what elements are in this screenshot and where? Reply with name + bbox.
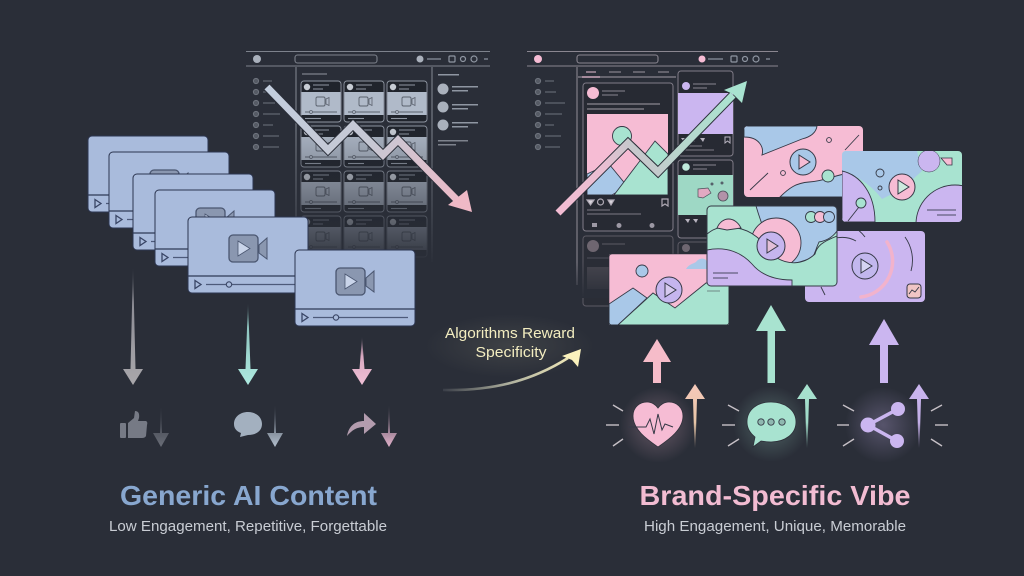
brand dashboard wireframe	[527, 52, 778, 306]
arrow: curved transition	[443, 349, 581, 390]
heading: generic AI content: Generic AI Content	[120, 480, 377, 511]
small up arrow: mint	[797, 384, 817, 448]
sidebar menu	[253, 78, 280, 150]
small down arrow: likes	[153, 404, 169, 447]
second post card faded	[575, 236, 677, 306]
subheading: generic: Low Engagement, Repetitive, Forgettable	[109, 519, 387, 535]
brand video card: mountains	[609, 254, 729, 325]
side post: purple	[678, 71, 733, 156]
icon: thumbs up	[120, 411, 147, 438]
brand video card: purple rings	[805, 231, 925, 302]
small up arrow: peach	[685, 384, 705, 448]
callout: algorithms reward specificity: Specificity	[476, 345, 547, 361]
small down arrow: shares	[381, 404, 397, 447]
large up arrow: pink	[643, 339, 671, 383]
icon: glowing chat bubble	[722, 386, 809, 462]
icon: share arrow	[347, 413, 376, 436]
side post: mint	[678, 160, 733, 238]
generic dashboard wireframe	[246, 52, 490, 267]
rising trend arrow	[558, 81, 747, 213]
callout: algorithms reward specificity	[425, 314, 595, 378]
small up arrow: purple	[909, 384, 929, 448]
stack of generic video cards	[88, 136, 415, 326]
brand video card: central featured	[707, 206, 837, 286]
small down arrow: comments	[267, 404, 283, 447]
brand video card: blue mint purple	[842, 151, 962, 222]
icon: glowing heart with pulse	[606, 387, 696, 463]
right suggestions column	[438, 74, 478, 146]
callout: algorithms reward specificity: Algorithms Reward	[445, 326, 575, 342]
heading: brand-specific vibe: Brand-Specific Vibe	[640, 480, 910, 511]
sidebar menu	[535, 78, 565, 150]
large up arrow: mint	[756, 305, 786, 383]
large up arrow: purple	[869, 319, 899, 383]
main post card	[583, 83, 673, 231]
brand video card: pink and blue	[744, 126, 863, 197]
icon: glowing share nodes	[837, 387, 948, 463]
subheading: brand: High Engagement, Unique, Memorable	[644, 519, 906, 535]
tabs	[578, 72, 676, 77]
long down arrow: mint	[238, 302, 258, 385]
icon: comment bubble	[234, 412, 262, 437]
long down arrow: pink	[352, 337, 372, 385]
long down arrow: gray	[123, 266, 143, 385]
thumbnail grid	[301, 81, 427, 257]
third side post faded	[678, 242, 733, 272]
declining trend arrow	[267, 87, 472, 212]
